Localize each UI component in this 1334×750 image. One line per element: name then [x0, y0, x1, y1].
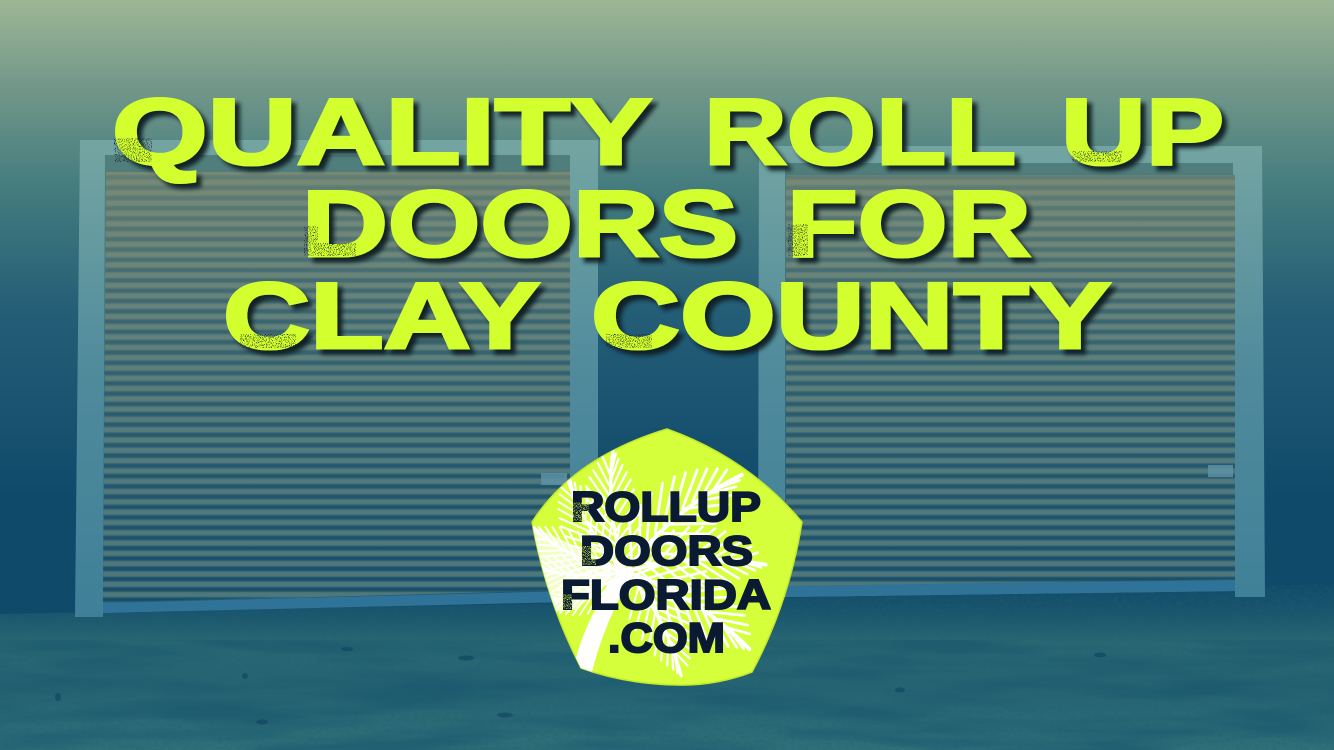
grass debris: [55, 647, 1106, 724]
right door panel: [786, 175, 1235, 586]
right door recess: [785, 163, 1233, 586]
logo line 1: ROLLUP: [571, 483, 761, 530]
title line 1: UP: [1061, 79, 1224, 184]
left door panel: [103, 172, 570, 603]
grass foreground: [0, 584, 1334, 750]
palm fronds: [532, 450, 768, 678]
palm trunk: [573, 566, 634, 672]
left door frame: [75, 140, 598, 617]
title distressed speckles: [114, 138, 1122, 348]
logo line 4: .COM: [608, 614, 725, 661]
logo line 2: DOORS: [580, 527, 753, 574]
title line 3: COUNTY: [591, 263, 1111, 368]
right door latch: [1208, 465, 1233, 477]
logo text: [561, 483, 771, 661]
logo badge: [516, 429, 802, 685]
title line 1: [112, 79, 1224, 184]
logo line 3: FLORIDA: [561, 571, 771, 618]
title: [112, 79, 1224, 368]
title line 3: CLAY: [223, 263, 540, 368]
title line 1: ROLL: [704, 79, 1016, 184]
badge shape: [532, 429, 802, 685]
title line 2: [302, 171, 1031, 276]
logo distressed speckles: [562, 502, 596, 609]
title line 3: [223, 263, 1111, 368]
left door recess: [103, 155, 570, 603]
title line 2: FOR: [787, 171, 1031, 276]
icon: palm tree: [532, 450, 768, 678]
left door bottom rail: [103, 591, 570, 613]
left door latch: [541, 473, 567, 485]
title line 2: DOORS: [302, 171, 738, 276]
title line 1: QUALITY: [112, 79, 652, 184]
right door slats: [786, 175, 1235, 586]
right door frame: [758, 146, 1265, 597]
left door slats: [103, 172, 570, 603]
right door bottom rail: [786, 580, 1235, 597]
left roll up door: [75, 140, 598, 617]
palm left-side solid highlight: [530, 525, 625, 612]
right roll up door: [758, 146, 1265, 597]
